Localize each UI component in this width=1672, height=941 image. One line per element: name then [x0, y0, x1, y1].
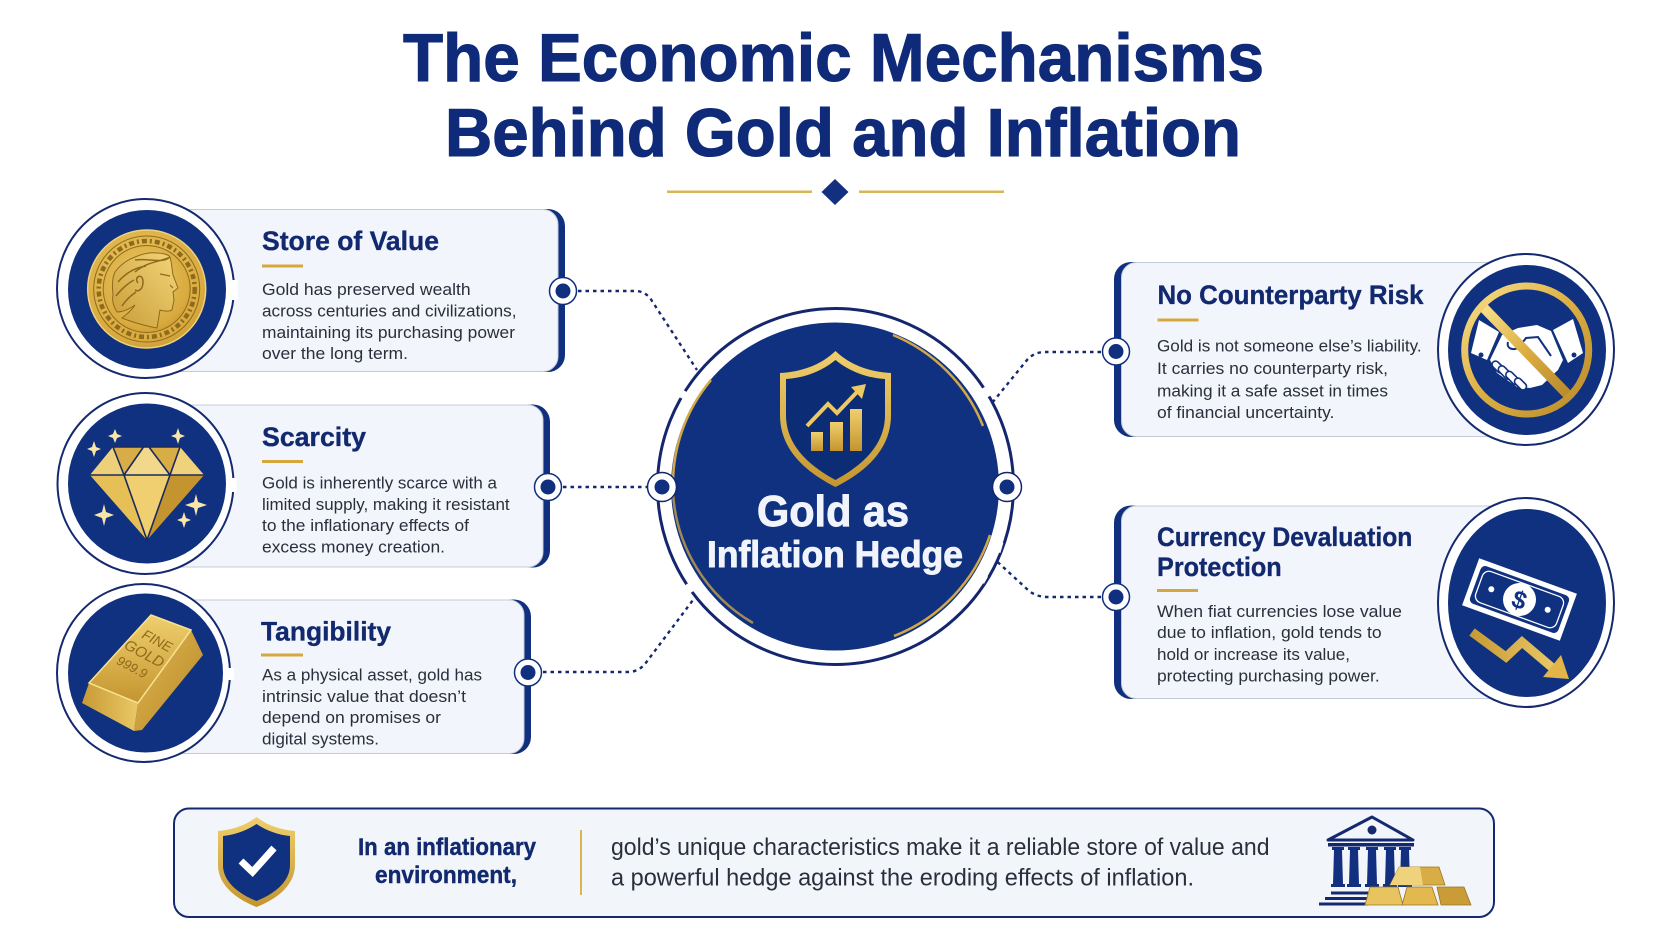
- connector node: currency devaluation protection: [1102, 584, 1130, 610]
- heading: currency devaluation protection: Currency Devaluation: [1157, 522, 1412, 552]
- body: scarcity: to the inflationary effects of: [262, 516, 469, 535]
- connector node: tangibility: [514, 659, 542, 686]
- icon: gold bar: [57, 584, 234, 762]
- body: store of value: over the long term.: [262, 344, 408, 363]
- icon: gold bar: GOLD: [121, 637, 167, 672]
- panel: no counterparty risk: [1114, 262, 1542, 437]
- body: no counterparty risk: Gold is not someone else’s liability.: [1157, 336, 1422, 356]
- body: no counterparty risk: It carries no counterparty risk,: [1157, 359, 1388, 378]
- panel: scarcity: [150, 404, 550, 568]
- banner lead text: [358, 834, 537, 889]
- heading: scarcity: Scarcity: [262, 422, 366, 452]
- banner body text: [611, 834, 1270, 892]
- body: no counterparty risk: [1157, 336, 1422, 422]
- body: currency devaluation protection: hold or increase its value,: [1157, 645, 1350, 664]
- title: [403, 20, 1264, 171]
- icon: bank and gold bars: [1319, 817, 1471, 905]
- heading: currency devaluation protection: [1157, 522, 1412, 582]
- connector node: no counterparty risk: [1102, 338, 1130, 365]
- banner lead text: environment,: [375, 862, 517, 889]
- icon: falling dollar: $: [1508, 585, 1531, 616]
- icon: check shield: [218, 817, 295, 907]
- body: store of value: across centuries and civilizations,: [262, 302, 516, 320]
- banner body text: gold’s unique characteristics make it a reliable store of value and: [611, 834, 1270, 861]
- body: scarcity: [262, 474, 510, 556]
- heading: store of value: Store of Value: [262, 226, 439, 256]
- body: tangibility: intrinsic value that doesn’t: [262, 687, 466, 706]
- hub node right: [992, 472, 1022, 502]
- connector node: scarcity: [534, 474, 562, 500]
- body: no counterparty risk: making it a safe asset in times: [1157, 382, 1388, 400]
- body: currency devaluation protection: When fiat currencies lose value: [1157, 602, 1402, 621]
- body: tangibility: digital systems.: [262, 730, 379, 748]
- body: store of value: [262, 280, 516, 363]
- icon: diamond: [58, 393, 237, 574]
- body: no counterparty risk: of financial uncertainty.: [1157, 403, 1334, 422]
- heading: no counterparty risk: No Counterparty Risk: [1158, 280, 1424, 310]
- icon: gold coin: [57, 199, 238, 378]
- body: tangibility: [262, 666, 482, 748]
- gold arcs: [673, 335, 990, 636]
- body: store of value: maintaining its purchasing power: [262, 323, 515, 342]
- title divider: [667, 179, 1004, 205]
- hub label: Inflation Hedge: [707, 534, 963, 575]
- panel: tangibility: [150, 600, 531, 754]
- hub label: [707, 487, 963, 575]
- central hub: gold as inflation hedge: [658, 308, 1014, 664]
- body: currency devaluation protection: protecting purchasing power.: [1157, 666, 1380, 686]
- hub node left: [648, 472, 676, 502]
- connector lines: [528, 291, 1116, 672]
- body: scarcity: limited supply, making it resistant: [262, 495, 510, 514]
- heading: currency devaluation protection: Protection: [1157, 552, 1282, 582]
- heading: tangibility: Tangibility: [261, 616, 391, 646]
- body: currency devaluation protection: [1157, 602, 1402, 686]
- connector node: store of value: [550, 278, 576, 304]
- banner lead text: In an inflationary: [358, 834, 537, 861]
- icon: falling dollar: [1438, 498, 1614, 707]
- title: The Economic Mechanisms: [403, 20, 1264, 96]
- body: store of value: Gold has preserved wealth: [262, 280, 471, 299]
- banner body text: a powerful hedge against the eroding effects of inflation.: [611, 864, 1194, 892]
- body: currency devaluation protection: due to inflation, gold tends to: [1157, 623, 1382, 642]
- body: scarcity: Gold is inherently scarce with a: [262, 474, 498, 492]
- title: Behind Gold and Inflation: [445, 95, 1241, 171]
- bottom banner: [174, 808, 1494, 917]
- panel: currency devaluation protection: [1114, 506, 1542, 699]
- hub label: Gold as: [757, 487, 909, 536]
- icon: gold bar: FINE: [140, 626, 176, 655]
- icon: gold bar: 999.9: [114, 653, 150, 681]
- body: tangibility: As a physical asset, gold has: [262, 666, 482, 684]
- icon: shield with growth chart: [780, 351, 891, 487]
- body: scarcity: excess money creation.: [262, 538, 445, 556]
- panel: store of value: [150, 209, 565, 372]
- icon: no handshake: [1438, 254, 1614, 445]
- body: tangibility: depend on promises or: [262, 708, 441, 727]
